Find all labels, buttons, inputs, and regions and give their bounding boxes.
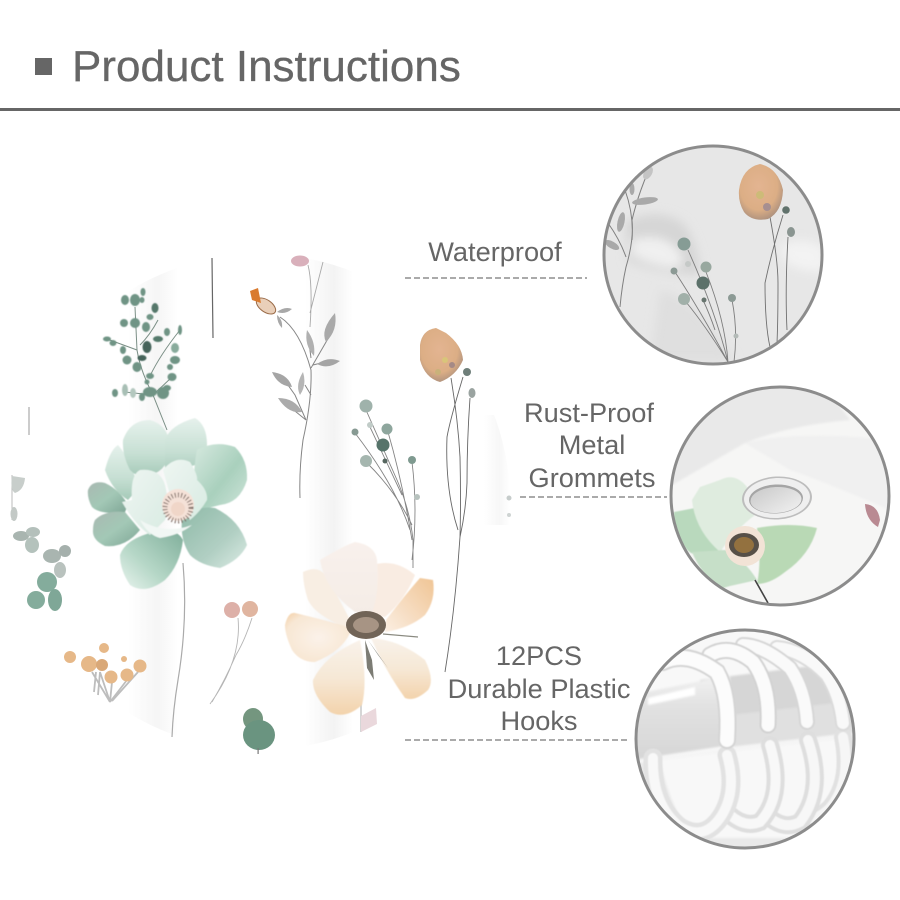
callout: plastic hooks [405, 640, 630, 740]
panel: grommet detail circle [660, 380, 890, 605]
icon: grey berry branch [352, 400, 420, 568]
callout: rust-proof metal grommets [520, 397, 667, 497]
panel: curtain floral illustration [10, 250, 512, 754]
title: Product Instructions [72, 42, 461, 91]
icon: eucalyptus sprig [103, 288, 182, 430]
panel: waterproof detail circle [603, 146, 825, 364]
icon: large peach flower [285, 542, 434, 732]
icon: pink twin buds [210, 601, 258, 704]
panel: hooks detail circle [632, 630, 860, 850]
callout: plastic hooks: Durable Plastic [448, 673, 630, 704]
icon: round green leaf [243, 708, 275, 754]
icon: tan stamens [64, 643, 146, 702]
callout: rust-proof metal grommets: Metal [559, 429, 625, 460]
icon: grey leafy stem with seed head [250, 256, 340, 498]
callout: plastic hooks: 12PCS [496, 640, 582, 671]
icon: left edge leaves [10, 475, 71, 611]
callout: rust-proof metal grommets: Rust-Proof [524, 397, 654, 428]
icon: bud with tall stems [420, 328, 512, 672]
callout: waterproof: Waterproof [428, 236, 562, 267]
icon: large green flower [88, 418, 247, 737]
callout: rust-proof metal grommets: Grommets [529, 462, 655, 493]
callout: plastic hooks: Hooks [500, 705, 578, 736]
